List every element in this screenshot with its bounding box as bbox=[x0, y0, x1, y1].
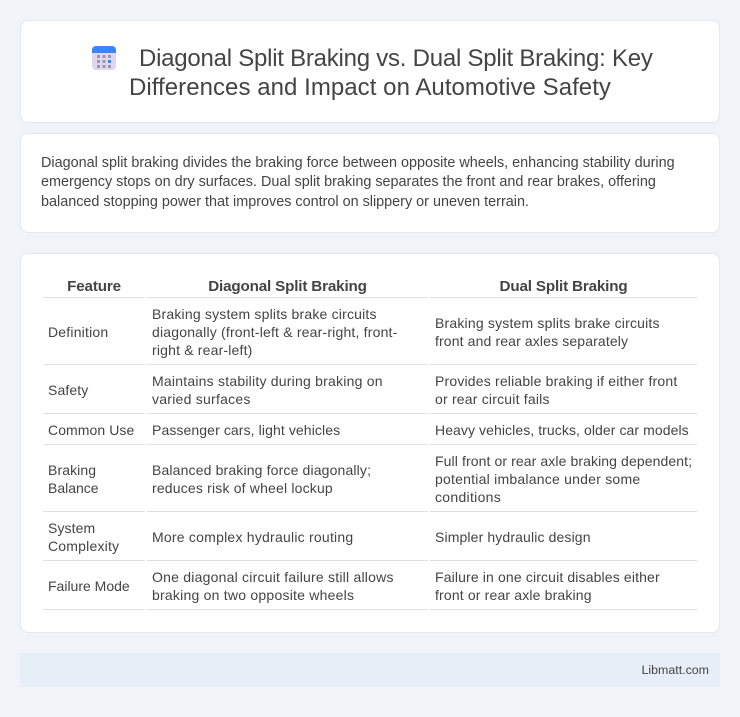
table row: Braking Balance: Balanced braking force diagonally; bbox=[152, 462, 371, 478]
table row: System Complexity: System bbox=[48, 520, 95, 536]
table row: Common Use: Common Use bbox=[48, 422, 134, 438]
table row: Definition: Braking system splits brake circuits bbox=[435, 315, 660, 331]
table row: Failure Mode bbox=[43, 569, 697, 610]
table row: Common Use: Heavy vehicles, trucks, older car models bbox=[435, 422, 689, 438]
table header row: Dual Split Braking bbox=[500, 278, 627, 295]
footer bar bbox=[20, 653, 720, 687]
panel: description bbox=[20, 133, 720, 233]
table row: Safety bbox=[43, 373, 697, 414]
icon: calendar bbox=[92, 46, 116, 70]
table row: Definition: front and rear axles separately bbox=[435, 333, 628, 349]
table row: Braking Balance: potential imbalance under some bbox=[435, 471, 640, 487]
table row: Braking Balance: Balance bbox=[48, 480, 99, 496]
text block: description bbox=[41, 155, 675, 210]
table row: Common Use: Passenger cars, light vehicles bbox=[152, 422, 340, 438]
title bbox=[129, 45, 653, 101]
table row: Braking Balance: reduces risk of wheel lockup bbox=[152, 480, 333, 496]
table row: Failure Mode: braking on two opposite wheels bbox=[152, 587, 354, 603]
table row: Braking Balance: Full front or rear axle braking dependent; bbox=[435, 453, 692, 469]
table row: Safety: or rear circuit fails bbox=[435, 391, 550, 407]
table row: System Complexity: Simpler hydraulic design bbox=[435, 529, 591, 545]
table row: Safety: Safety bbox=[48, 382, 88, 398]
table row: Safety: Provides reliable braking if either front bbox=[435, 373, 677, 389]
table row: Definition: Braking system splits brake circuits bbox=[152, 306, 377, 322]
table row: Definition bbox=[43, 306, 697, 365]
table row: Braking Balance: Braking bbox=[48, 462, 96, 478]
table header row: Feature bbox=[67, 278, 121, 295]
title: Differences and Impact on Automotive Safety bbox=[129, 74, 611, 101]
table row: Failure Mode: One diagonal circuit failure still allows bbox=[152, 569, 394, 585]
table row: Safety: varied surfaces bbox=[152, 391, 251, 407]
table row: Safety: Maintains stability during braking on bbox=[152, 373, 383, 389]
table header row bbox=[43, 278, 697, 298]
table row: Braking Balance: conditions bbox=[435, 489, 501, 505]
table row: Common Use bbox=[43, 422, 697, 445]
panel: comparison table bbox=[20, 253, 720, 633]
panel: title header bbox=[20, 20, 720, 123]
table row: Failure Mode: Failure in one circuit disables either bbox=[435, 569, 660, 585]
table row: Definition: diagonally (front-left & rear-right, front- bbox=[152, 324, 398, 340]
table row: Definition: right & rear-left) bbox=[152, 342, 252, 358]
text block: description: Diagonal split braking divides the braking force between opposite wheels, enhancing stability during bbox=[41, 155, 675, 171]
table row: Definition: Definition bbox=[48, 324, 108, 340]
footer text: Libmatt.com bbox=[642, 663, 709, 677]
title: Diagonal Split Braking vs. Dual Split Braking: Key bbox=[139, 45, 653, 72]
table header row: Diagonal Split Braking bbox=[208, 278, 367, 295]
table row: System Complexity: More complex hydraulic routing bbox=[152, 529, 353, 545]
table row: System Complexity: Complexity bbox=[48, 538, 119, 554]
text block: description: emergency stops on dry surfaces. Dual split braking separates the front and rear brakes, offering bbox=[41, 174, 656, 190]
table row: System Complexity bbox=[43, 520, 697, 561]
table row: Failure Mode: Failure Mode bbox=[48, 578, 130, 594]
text block: description: balanced stopping power that improves control on slippery or uneven terrain. bbox=[41, 194, 529, 210]
table row: Failure Mode: front or rear axle braking bbox=[435, 587, 592, 603]
table row: Braking Balance bbox=[43, 453, 697, 512]
